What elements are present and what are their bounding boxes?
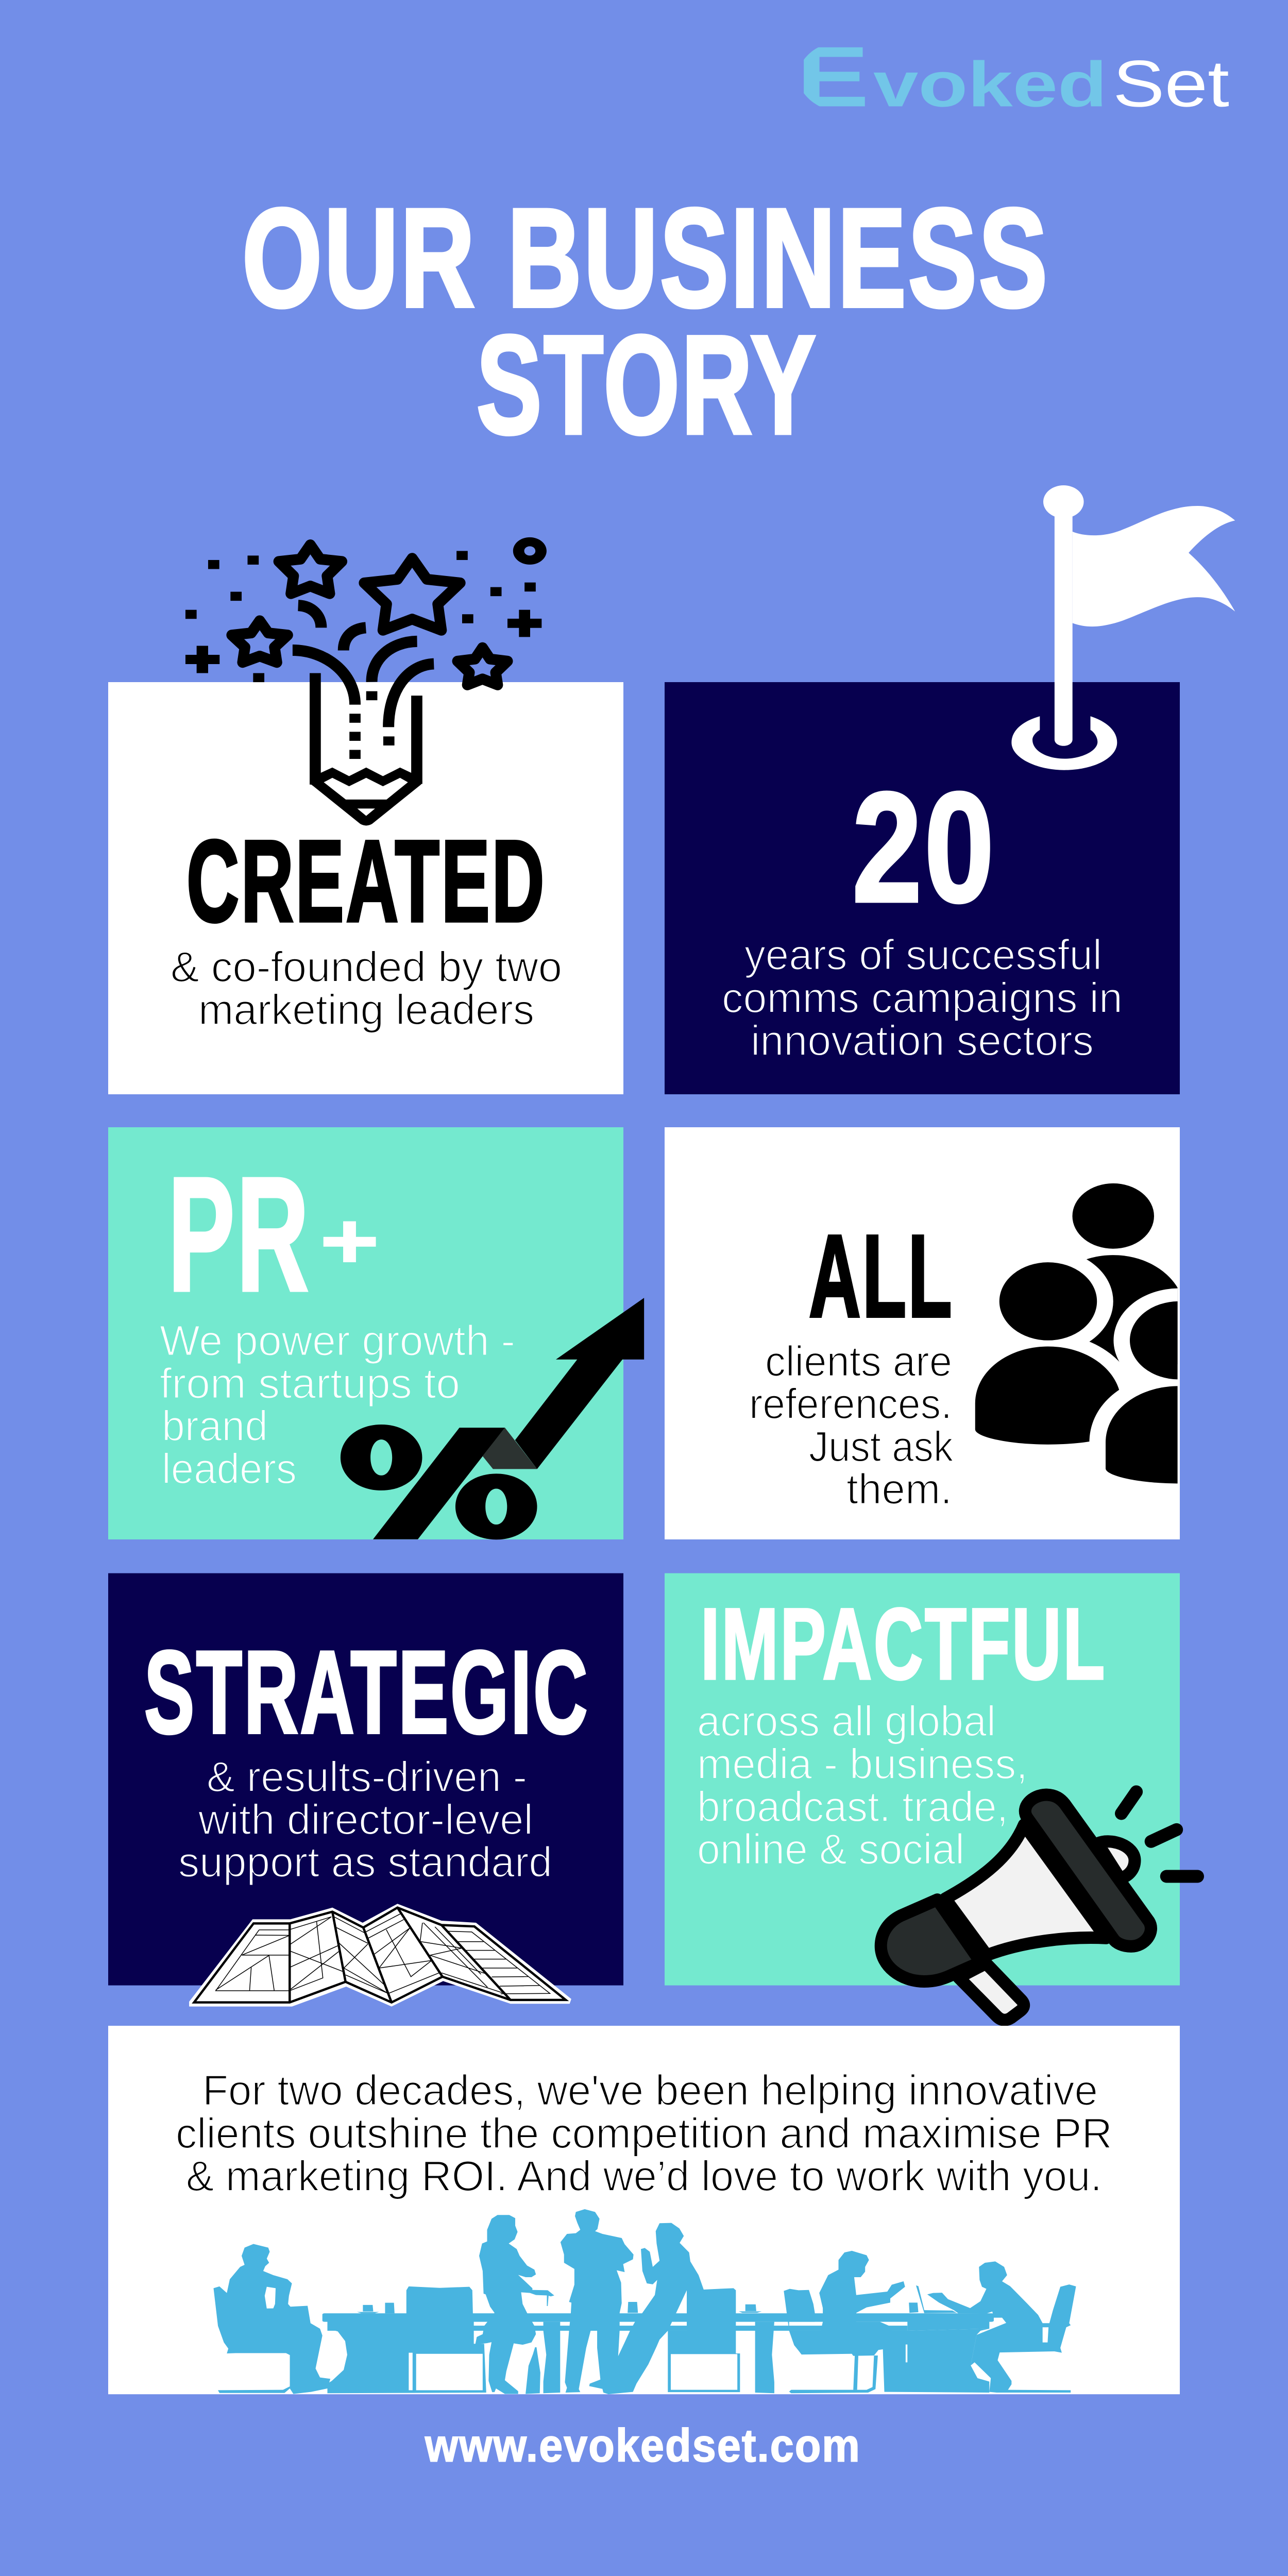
- text block: clients are: [765, 1337, 952, 1385]
- text block: [697, 1698, 1028, 1873]
- icon: flag: [1011, 485, 1235, 770]
- text block: media - business,: [697, 1740, 1028, 1788]
- panel: ALL clients: [665, 1127, 1180, 1539]
- text block: [749, 1337, 953, 1513]
- icon: pencil with stars: [185, 537, 547, 825]
- logo: EvokedSet: [793, 28, 1229, 125]
- text block: across all global: [697, 1698, 996, 1744]
- title: STORY: [477, 307, 818, 463]
- text block: & results-driven -: [207, 1753, 527, 1800]
- title: [242, 180, 1049, 463]
- text block: comms campaigns in: [722, 974, 1123, 1021]
- text block: [722, 931, 1123, 1064]
- text block: [176, 2066, 1112, 2200]
- text block: Just ask: [809, 1423, 953, 1470]
- panel background: [108, 1127, 623, 1539]
- text block: them.: [846, 1465, 952, 1513]
- text block: years of successful: [744, 931, 1102, 978]
- logo: EvokedSet: voked: [873, 48, 1107, 120]
- panel background: [665, 682, 1180, 1094]
- panel: created: [108, 537, 623, 1094]
- text block: broadcast. trade,: [697, 1783, 1008, 1831]
- text block: [171, 943, 562, 1033]
- panel background: [665, 1573, 1180, 1986]
- heading: STRATEGIC: [144, 1626, 589, 1758]
- website url: www.evokedset.com: [425, 2420, 861, 2471]
- icon: group of people: [975, 1183, 1178, 1484]
- text block: [178, 1753, 552, 1886]
- logo: EvokedSet: E: [796, 28, 869, 125]
- icon: folded map: [189, 1904, 571, 2007]
- panel: closing statement: [108, 2026, 1180, 2394]
- illustration: business meeting silhouettes: [213, 2209, 1076, 2394]
- text block: [160, 1317, 515, 1493]
- text block: from startups to: [160, 1360, 460, 1407]
- panel background: [108, 1573, 623, 1986]
- panel: 20 years: [665, 485, 1235, 1094]
- panel: PR+: [108, 1127, 644, 1539]
- text block: leaders: [162, 1445, 297, 1493]
- panel: ALL clients: ALL: [809, 1211, 954, 1342]
- text block: brand: [162, 1402, 268, 1450]
- text block: marketing leaders: [198, 986, 534, 1033]
- heading: CREATED: [187, 817, 546, 946]
- panel background: [665, 1127, 1180, 1539]
- text block: references.: [749, 1380, 952, 1427]
- text block: with director-level: [198, 1796, 533, 1843]
- heading: PR: [168, 1143, 311, 1325]
- big number: 20: [852, 759, 996, 935]
- heading: +: [320, 1197, 379, 1284]
- text block: support as standard: [178, 1838, 552, 1886]
- text block: & co-founded by two: [171, 943, 562, 990]
- panel background: [108, 682, 623, 1094]
- panel: impactful: [665, 1573, 1197, 2020]
- icon: percent with rising arrow: [341, 1298, 644, 1539]
- panel background: [108, 2026, 1180, 2394]
- panel: strategic: [108, 1573, 623, 2007]
- logo: EvokedSet: Set: [1113, 47, 1229, 121]
- icon: megaphone: [881, 1792, 1197, 2020]
- text block: online & social: [697, 1825, 964, 1873]
- text block: innovation sectors: [751, 1017, 1094, 1064]
- text block: We power growth -: [160, 1317, 515, 1364]
